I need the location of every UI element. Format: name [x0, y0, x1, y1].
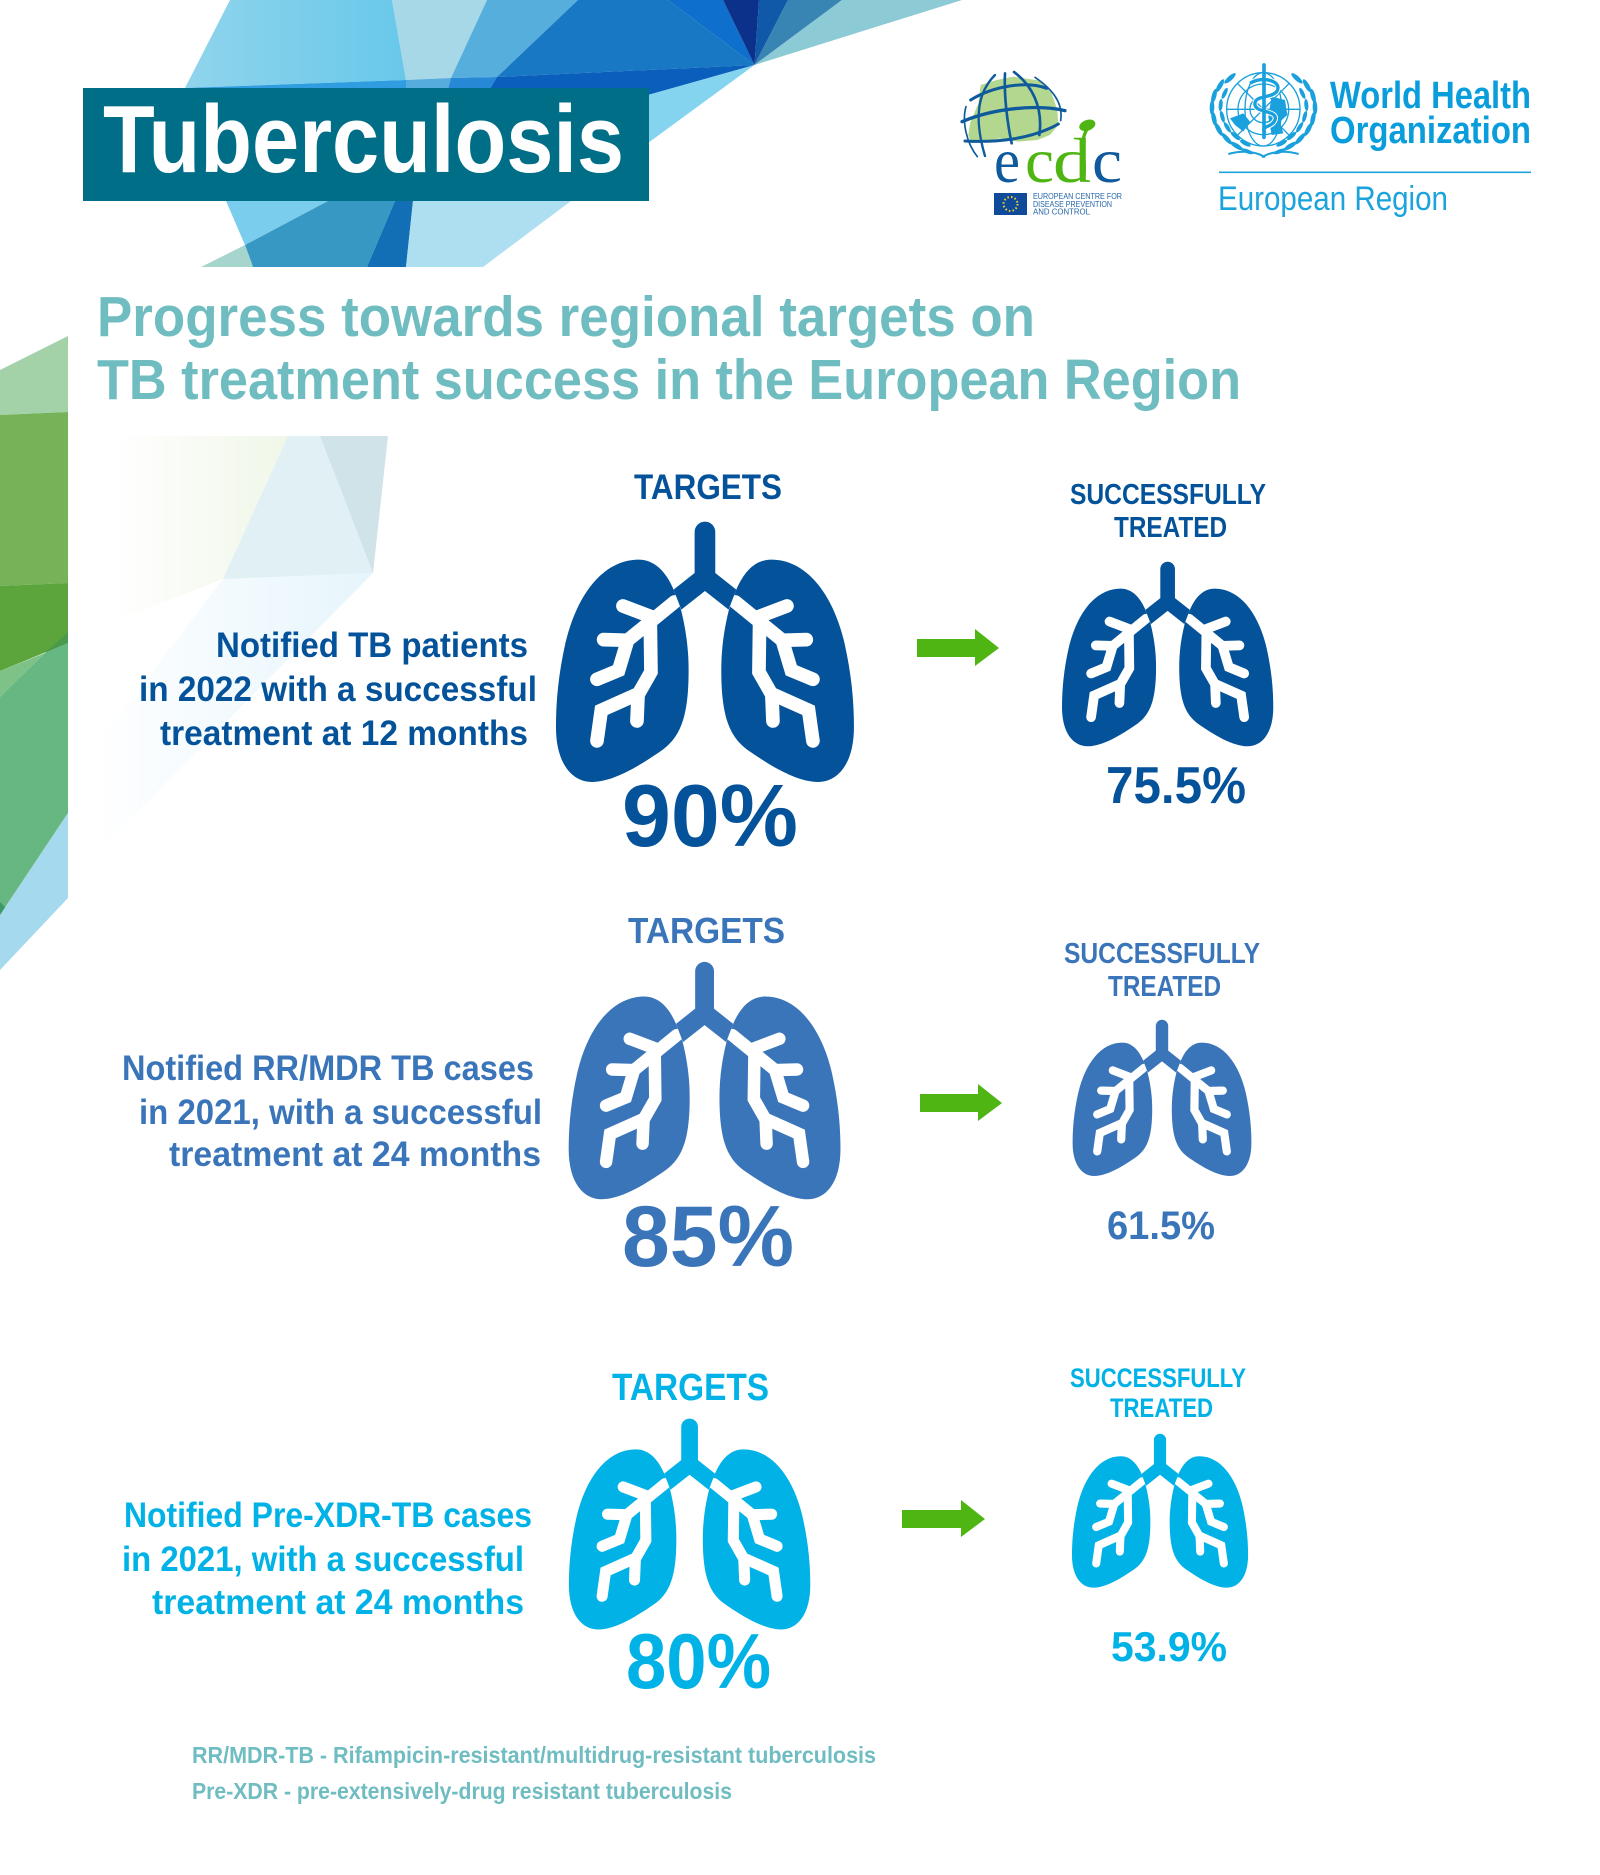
row 3 target value: 80%: [626, 1617, 771, 1705]
ECDC full name: EUROPEAN CENTRE FOR: [1033, 191, 1122, 201]
row 2: notified RR/MDR TB cases: [122, 910, 1260, 1285]
row 1 treated value: 75.5%: [1106, 757, 1246, 815]
row 1 target value: 90%: [622, 766, 798, 865]
heading: [97, 285, 1241, 412]
row 3 description: in 2021, with a successful: [122, 1540, 524, 1579]
logo: World Health Organization: Organization: [1330, 110, 1531, 152]
row 2 treated label: TREATED: [1108, 971, 1221, 1003]
heading: TB treatment success in the European Region: [97, 348, 1241, 412]
heading: Progress towards regional targets on: [97, 285, 1035, 349]
row 3 treated value: 53.9%: [1111, 1623, 1227, 1670]
row 2 treated value: 61.5%: [1107, 1204, 1215, 1248]
ECDC wordmark: [994, 126, 1122, 196]
row 2 treated label: SUCCESSFULLY: [1064, 938, 1260, 970]
row 3: notified Pre-XDR-TB cases: [122, 1363, 1248, 1705]
footnotes: [192, 1742, 876, 1804]
footnotes: Pre-XDR - pre-extensively-drug resistant tuberculosis: [192, 1778, 732, 1804]
row 3 treated label: [1070, 1363, 1246, 1423]
logo: World Health Organization: European Region: [1218, 180, 1448, 218]
row 3 description: treatment at 24 months: [152, 1583, 524, 1622]
logo: World Health Organization: [1209, 65, 1531, 218]
row 2 arrow: [920, 1084, 1002, 1121]
row 1 description: [139, 626, 537, 753]
background: faded polygon panel: [85, 436, 388, 860]
row 1 description: Notified TB patients: [216, 626, 528, 665]
row 2 target value: 85%: [622, 1189, 794, 1285]
row 1 target lungs icon: [556, 522, 854, 782]
ECDC globe: [962, 72, 1097, 175]
row 3 arrow: [902, 1500, 985, 1537]
ECDC wordmark: e: [994, 126, 1020, 196]
row 3 treated label: SUCCESSFULLY: [1070, 1363, 1246, 1393]
EU flag: [994, 193, 1027, 215]
row 3 description: [122, 1496, 532, 1622]
row 2 description: [122, 1049, 542, 1174]
row 3 treated label: TREATED: [1110, 1393, 1213, 1423]
row 2 description: in 2021, with a successful: [139, 1093, 542, 1132]
row 3 description: Notified Pre-XDR-TB cases: [124, 1496, 532, 1535]
row 1 treated label: [1070, 479, 1266, 544]
row 1: notified TB patients: [139, 468, 1273, 865]
row 2 description: treatment at 24 months: [169, 1135, 541, 1174]
WHO emblem: [1209, 65, 1318, 157]
row 2 treated label: [1064, 938, 1260, 1003]
row 3 targets label: TARGETS: [612, 1367, 769, 1409]
row 1 description: treatment at 12 months: [160, 714, 528, 753]
row 2 targets label: TARGETS: [628, 910, 785, 951]
row 1 treated label: SUCCESSFULLY: [1070, 479, 1266, 511]
row 1 targets label: TARGETS: [634, 468, 782, 507]
title banner: Tuberculosis: [103, 86, 624, 193]
ECDC wordmark: c: [1092, 126, 1122, 196]
row 1 arrow: [917, 629, 999, 666]
background: top polygon cluster: [185, 0, 962, 267]
row 3 target lungs icon: [569, 1419, 810, 1629]
background: left green polygon strip: [0, 336, 68, 970]
row 2 target lungs icon: [569, 962, 840, 1199]
row 1 treated lungs icon: [1062, 562, 1273, 746]
WHO name: World Health: [1330, 75, 1531, 117]
ECDC wordmark: c: [1025, 126, 1054, 196]
ECDC full name: DISEASE PREVENTION: [1033, 199, 1112, 209]
ECDC full name: AND CONTROL: [1033, 206, 1090, 216]
footnotes: RR/MDR-TB - Rifampicin-resistant/multidrug-resistant tuberculosis: [192, 1742, 876, 1768]
row 1 treated label: TREATED: [1114, 512, 1227, 544]
row 2 description: Notified RR/MDR TB cases: [122, 1049, 534, 1088]
ECDC full name: [1033, 191, 1122, 216]
logo: ECDC: [962, 72, 1122, 216]
row 3 treated lungs icon: [1072, 1434, 1248, 1588]
row 1 description: in 2022 with a successful: [139, 670, 537, 709]
ECDC wordmark: d: [1053, 126, 1091, 196]
row 2 treated lungs icon: [1073, 1020, 1251, 1176]
